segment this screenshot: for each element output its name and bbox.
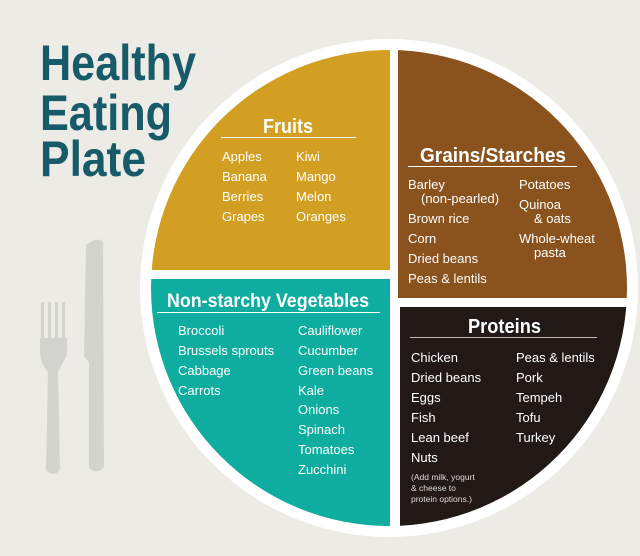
panel: vegetables: Carrots [178, 383, 221, 398]
panel: vegetables: Green beans [298, 363, 374, 378]
panel: fruits: Kiwi [296, 149, 320, 164]
panel: proteins: Lean beef [411, 430, 469, 445]
panel: proteins: Turkey [516, 430, 556, 445]
panel: fruits: Oranges [296, 209, 346, 224]
panel: fruits: Banana [222, 169, 268, 184]
panel: vegetables: Brussels sprouts [178, 343, 275, 358]
panel: grains: Dried beans [408, 251, 479, 266]
panel: grains: Brown rice [408, 211, 469, 226]
panel: grains: Peas & lentils [408, 271, 487, 286]
title: Healthy [40, 35, 196, 91]
panel: vegetables: Zucchini [298, 462, 347, 477]
panel: fruits: Mango [296, 169, 336, 184]
panel: fruits [140, 40, 390, 270]
panel: vegetables: Spinach [298, 422, 345, 437]
panel: proteins: protein options.) [411, 494, 472, 504]
panel: fruits: Berries [222, 189, 264, 204]
icon: knife [84, 240, 104, 472]
panel: vegetables: Cauliflower [298, 323, 363, 338]
panel: grains: Potatoes [519, 177, 571, 192]
panel: vegetables: Cabbage [178, 363, 231, 378]
panel: proteins: Nuts [411, 450, 438, 465]
panel: grains: & oats [534, 211, 571, 226]
panel: vegetables: Kale [298, 383, 324, 398]
panel: vegetables: Tomatoes [298, 442, 355, 457]
icon: fork [40, 302, 67, 474]
panel: vegetables: Non-starchy Vegetables [167, 291, 369, 312]
panel: grains [398, 40, 638, 298]
panel: fruits: Apples [222, 149, 262, 164]
panel: grains: Quinoa [519, 197, 562, 212]
panel: vegetables: Cucumber [298, 343, 359, 358]
panel: proteins: Dried beans [411, 370, 482, 385]
panel: grains: Whole-wheat [519, 231, 595, 246]
panel: vegetables [140, 279, 390, 526]
panel: vegetables: Broccoli [178, 323, 224, 338]
panel: grains: Barley [408, 177, 445, 192]
panel: fruits: Fruits [263, 116, 313, 138]
panel: fruits: Melon [296, 189, 331, 204]
panel: proteins: Peas & lentils [516, 350, 595, 365]
title: Plate [40, 131, 146, 187]
panel: grains: Grains/Starches [420, 145, 566, 167]
title: Eating [40, 85, 172, 141]
panel: vegetables: Onions [298, 402, 340, 417]
panel: proteins: & cheese to [411, 483, 456, 493]
panel: proteins: (Add milk, yogurt [411, 472, 475, 482]
panel: proteins: Chicken [411, 350, 458, 365]
panel: proteins: Fish [411, 410, 436, 425]
panel: proteins: Tempeh [516, 390, 562, 405]
panel: grains: pasta [534, 245, 567, 260]
panel: proteins [400, 307, 626, 526]
panel: proteins: Tofu [516, 410, 541, 425]
panel: proteins: Proteins [468, 316, 541, 338]
panel: grains: Corn [408, 231, 436, 246]
panel: grains: (non-pearled) [421, 191, 499, 206]
panel: proteins: Pork [516, 370, 543, 385]
panel: fruits: Grapes [222, 209, 265, 224]
title [40, 35, 196, 187]
panel: proteins: Eggs [411, 390, 441, 405]
plate [140, 39, 638, 537]
